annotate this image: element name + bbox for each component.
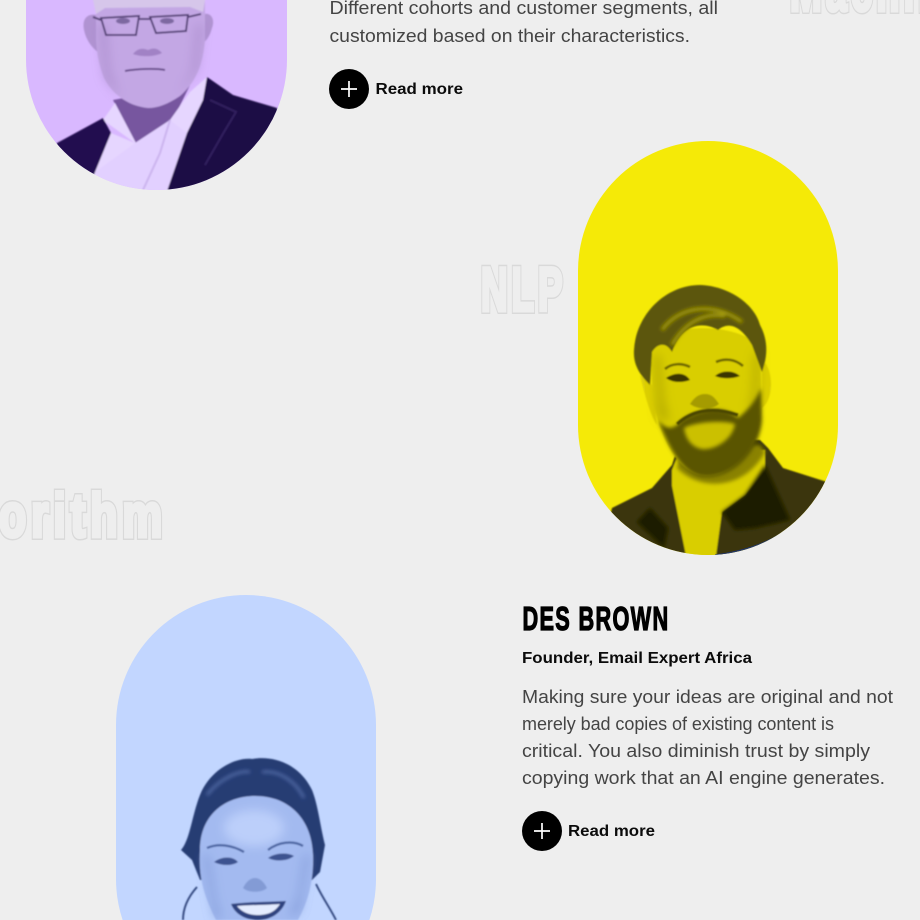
text block: Des Brown quote: merely bad copies of existing content is	[522, 714, 834, 734]
collar shadow	[637, 465, 790, 548]
name heading: Des Brown: DES BROWN	[522, 600, 670, 637]
jacket right	[166, 76, 278, 190]
button: read more 1: Read more	[376, 81, 463, 98]
nose	[133, 48, 162, 56]
shirt placket	[143, 120, 170, 190]
button: read more 2: Read more	[568, 823, 655, 840]
text block: cohorts description	[330, 0, 718, 46]
eyes	[214, 854, 294, 865]
button: read more 2	[522, 811, 655, 851]
hair	[634, 285, 766, 385]
hair	[181, 758, 325, 880]
hair	[92, 0, 206, 14]
shirt	[93, 76, 208, 176]
smile	[231, 901, 286, 920]
face side shadows	[654, 350, 760, 422]
neck shadow	[113, 85, 190, 146]
text block: cohorts description: customized based on their characteristics.	[330, 26, 690, 46]
face side shadows	[203, 855, 310, 918]
portrait: man on yellow	[578, 141, 845, 560]
inner tee and neck	[672, 450, 765, 556]
eyebrows	[207, 843, 303, 852]
face	[650, 328, 762, 476]
ghost word: NLP: NLP	[481, 255, 566, 324]
jacket left	[56, 117, 112, 174]
face shading	[99, 28, 202, 88]
eyes	[116, 18, 130, 24]
forehead highlight	[224, 810, 284, 846]
beard	[658, 388, 762, 477]
text block: Des Brown quote: Making sure your ideas are original and not	[522, 687, 893, 707]
button: read more 1	[329, 69, 463, 109]
mouth	[125, 69, 165, 71]
text block: Des Brown quote: copying work that an AI engine generates.	[522, 768, 885, 788]
text block: Des Brown quote: critical. You also diminish trust by simply	[522, 741, 870, 761]
portrait: woman on blue	[116, 595, 376, 920]
hair wisps	[183, 884, 336, 920]
role: founder: Founder, Email Expert Africa	[522, 650, 752, 667]
hair highlights	[207, 772, 304, 798]
text block: Des Brown quote	[522, 687, 893, 788]
navy edge	[714, 532, 782, 555]
shirt	[610, 439, 826, 555]
face	[200, 796, 313, 920]
nose	[690, 394, 719, 408]
glasses	[93, 14, 201, 35]
ears	[84, 14, 213, 52]
chin and lip	[684, 422, 735, 449]
nose	[243, 878, 267, 892]
eyes and brows	[666, 372, 740, 382]
ghost word: NLP: NLP	[481, 255, 566, 324]
face	[96, 0, 205, 108]
ears	[640, 360, 771, 425]
portrait: man on purple	[26, 0, 290, 200]
